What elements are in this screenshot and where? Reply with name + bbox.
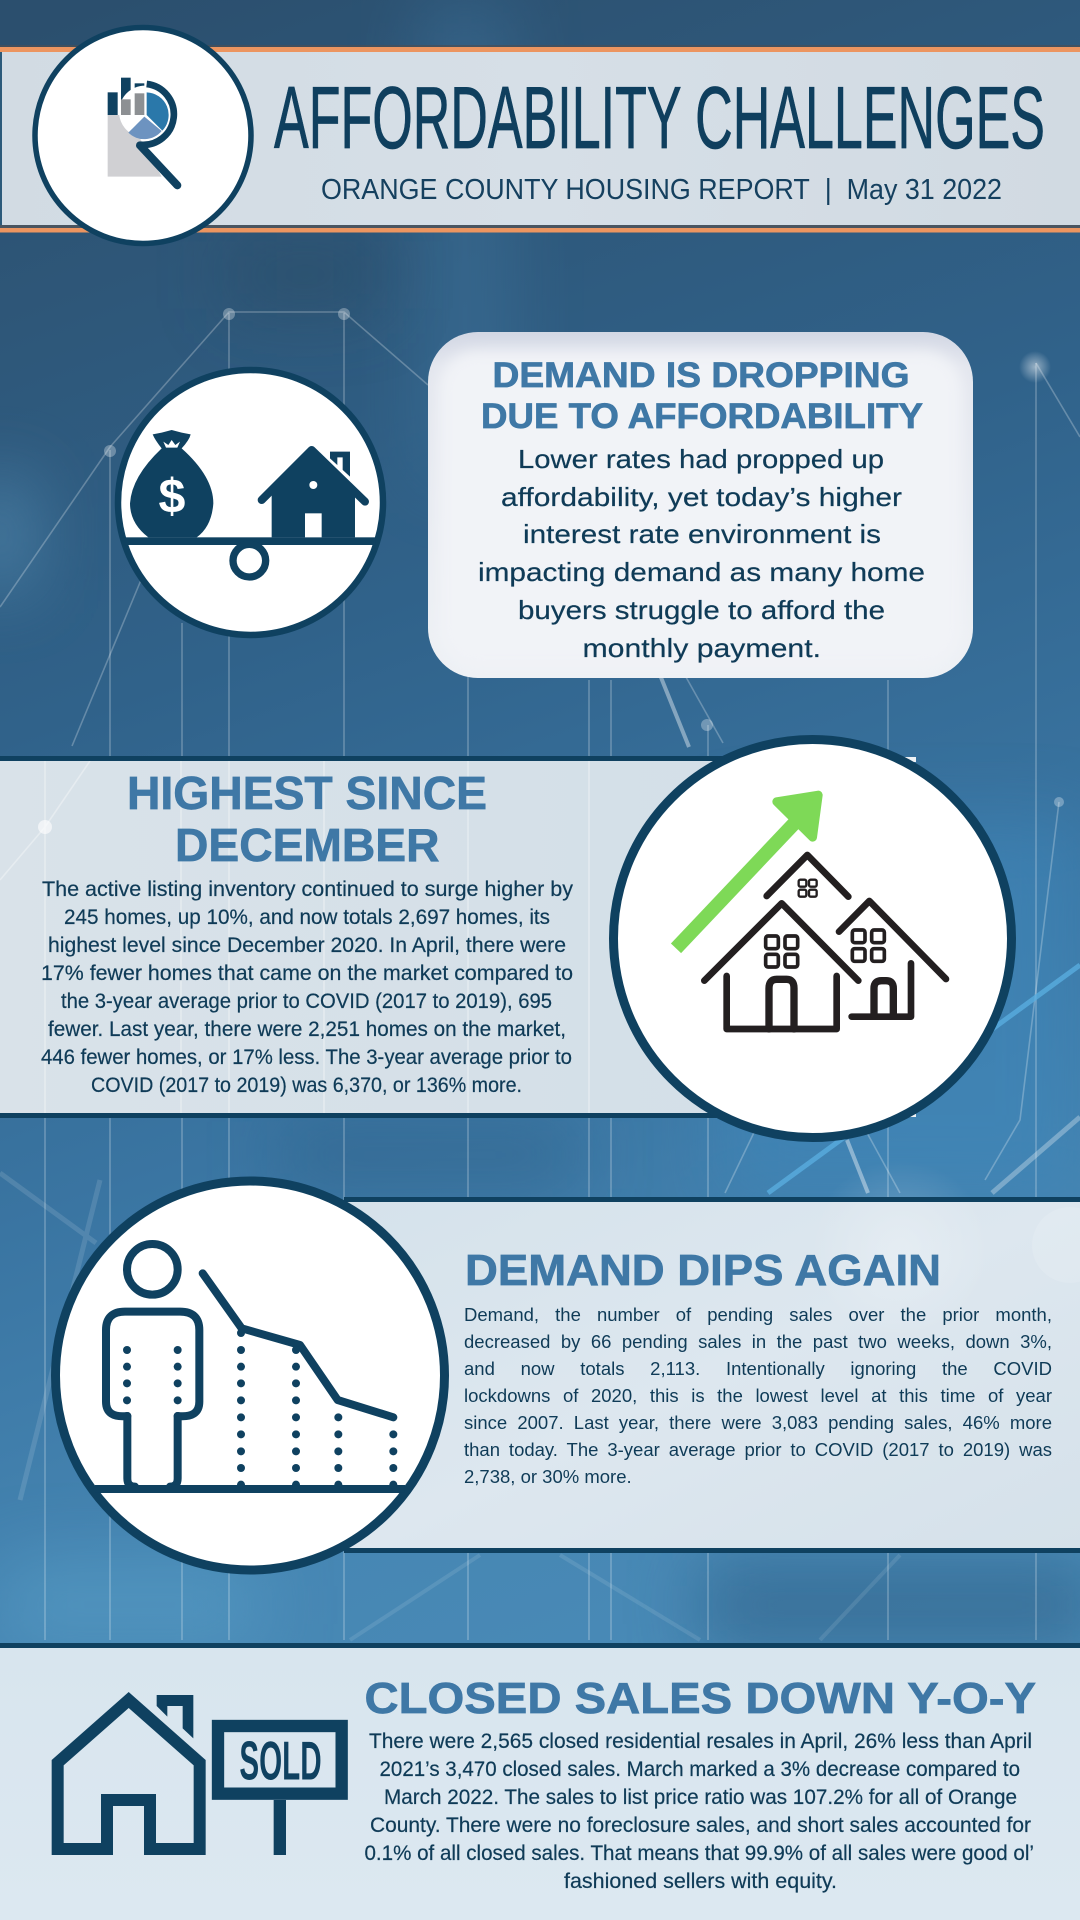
heading: CLOSED SALES DOWN Y-O-Y xyxy=(364,1674,1036,1723)
icon: sold house and sign xyxy=(58,1695,342,1855)
body text: monthly payment. xyxy=(582,633,821,663)
body text: impacting demand as many home xyxy=(478,557,925,587)
heading xyxy=(127,767,487,871)
panel: demand is dropping xyxy=(428,332,973,678)
body text: highest level since December 2020. In April, there were xyxy=(48,934,566,957)
body text: 0.1% of all closed sales. That means that 99.9% of all sales were good ol’ xyxy=(364,1842,1034,1865)
icon: scale with money bag and house xyxy=(118,370,383,635)
body text: Lower rates had propped up xyxy=(518,444,884,474)
panel: closed sales xyxy=(0,1643,1080,1920)
heading: DEMAND IS DROPPING xyxy=(492,356,910,395)
heading: DUE TO AFFORDABILITY xyxy=(481,397,923,436)
subtitle: ORANGE COUNTY HOUSING REPORT | May 31 2022 xyxy=(321,174,1002,206)
body text: COVID (2017 to 2019) was 6,370, or 136% more. xyxy=(91,1074,522,1097)
heading: DECEMBER xyxy=(175,819,440,871)
top banner xyxy=(0,28,1080,244)
body text xyxy=(478,444,925,663)
icon: sold house and sign: SOLD xyxy=(239,1729,322,1791)
heading: HIGHEST SINCE xyxy=(127,767,487,819)
body text: 245 homes, up 10%, and now totals 2,697 homes, its xyxy=(64,906,550,929)
heading: DEMAND DIPS AGAIN xyxy=(465,1246,941,1295)
body text: interest rate environment is xyxy=(523,519,881,549)
body text: County. There were no foreclosure sales, and short sales accounted for xyxy=(370,1814,1031,1837)
body text: and now totals 2,113. Intentionally ignoring the COVID xyxy=(464,1358,1052,1379)
body text: 17% fewer homes that came on the market compared to xyxy=(41,962,573,985)
icon: scale with money bag and house: $ xyxy=(159,470,186,524)
panel: demand dips again xyxy=(344,1160,1080,1553)
body text: The active listing inventory continued to surge higher by xyxy=(42,878,574,901)
body text: affordability, yet today’s higher xyxy=(501,482,902,512)
icon: person with declining chart xyxy=(56,1181,444,1570)
icon: houses with rising arrow xyxy=(614,740,1012,1138)
body text: fashioned sellers with equity. xyxy=(564,1870,837,1893)
heading xyxy=(481,356,923,436)
body text: There were 2,565 closed residential resales in April, 26% less than April xyxy=(369,1730,1032,1753)
logo badge xyxy=(35,28,251,244)
panel: highest since december xyxy=(0,756,916,1118)
body text: fewer. Last year, there were 2,251 homes on the market, xyxy=(48,1018,566,1041)
body text: Demand, the number of pending sales over the prior month, xyxy=(464,1304,1052,1325)
body text: since 2007. Last year, there were 3,083 pending sales, 46% more xyxy=(464,1412,1052,1433)
body text: buyers struggle to afford the xyxy=(518,595,885,625)
body text: the 3-year average prior to COVID (2017 to 2019), 695 xyxy=(61,990,552,1013)
body text: lockdowns of 2020, this is the lowest level at this time of year xyxy=(464,1385,1052,1406)
body text: 2,738, or 30% more. xyxy=(464,1466,632,1487)
body text: than today. The 3-year average prior to COVID (2017 to 2019) was xyxy=(464,1439,1052,1460)
body text: decreased by 66 pending sales in the past two weeks, down 3%, xyxy=(464,1331,1052,1352)
body text: 446 fewer homes, or 17% less. The 3-year average prior to xyxy=(41,1046,572,1069)
body text xyxy=(41,878,574,1097)
body text: 2021’s 3,470 closed sales. March marked a 3% decrease compared to xyxy=(380,1758,1020,1781)
body text: March 2022. The sales to list price ratio was 107.2% for all of Orange xyxy=(384,1786,1017,1809)
body text xyxy=(464,1301,1052,1491)
body text xyxy=(364,1730,1034,1893)
